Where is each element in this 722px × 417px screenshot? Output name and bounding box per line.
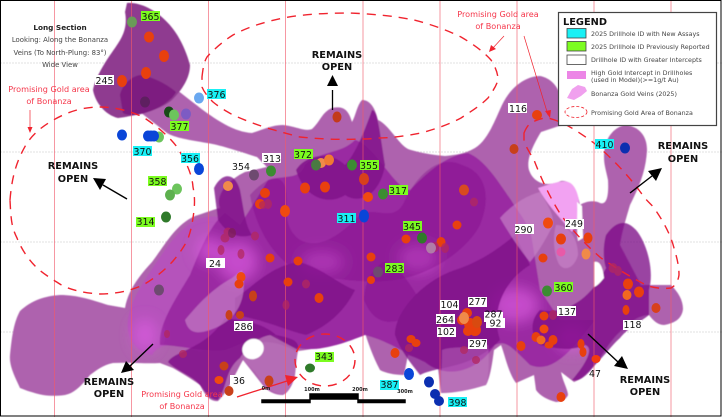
annotation: left: [8, 84, 90, 133]
open arrow: top centre: OPEN: [322, 62, 352, 73]
legend item: greater intercepts: Drillhole ID with Greater Intercepts: [591, 57, 702, 64]
open arrow: right top: REMAINS: [658, 141, 708, 152]
labels: greater intercepts (white): 290: [515, 225, 532, 236]
legend item: previously reported: [567, 42, 710, 51]
open arrow: bottom right: [588, 334, 670, 398]
annotation: bottom: [141, 375, 298, 411]
open arrow: bottom left: OPEN: [94, 389, 124, 400]
annotation: top right: of Bonanza: [475, 21, 521, 31]
labels: previously reported (green): 343: [315, 352, 333, 363]
open arrow: right top: OPEN: [668, 154, 698, 165]
labels: previously reported (green): 358: [149, 177, 166, 188]
vein: upper left lobe 365: [93, 3, 190, 118]
vein: deep purple folds: [168, 110, 651, 400]
markers: orange-red intercepts: [117, 32, 660, 402]
labels: greater intercepts (white): 277: [469, 297, 486, 308]
labels: previously reported (green): [136, 11, 573, 363]
vein: overlapped lobe dark: [120, 75, 176, 115]
open arrow: left: REMAINS: [48, 161, 98, 172]
vein: lighter translucent overlays: [185, 192, 578, 394]
labels: new assays (cyan): 398: [449, 398, 466, 409]
promising gold annotations: [8, 9, 551, 411]
annotation: left: Promising Gold area: [8, 84, 90, 94]
legend item: bonanza veins: [567, 85, 677, 100]
labels: previously reported (green): 365: [142, 12, 159, 23]
long section description: Wide View: [42, 61, 78, 69]
gaps: white notches in the right lobes: [577, 202, 604, 287]
legend item: greater intercepts: [567, 55, 702, 64]
annotation: bottom: of Bonanza: [159, 401, 205, 411]
annotation: bottom: Promising Gold area: [141, 389, 223, 399]
labels: previously reported (green): 377: [171, 122, 188, 133]
labels: greater intercepts (white): 245: [96, 76, 113, 87]
open arrow: top centre: [312, 50, 362, 110]
labels: previously reported (green): 317: [389, 186, 407, 197]
dashed area: top centre: [202, 13, 498, 139]
long section description: Long Section: [33, 23, 87, 32]
long section description: [12, 23, 108, 69]
labels: greater intercepts (white): 102: [437, 327, 455, 338]
dashed area: left: [10, 107, 194, 294]
labels: previously reported (green): 372: [294, 150, 312, 161]
vein: bright right lobe: [538, 181, 579, 232]
labels: new assays (cyan): 376: [208, 90, 225, 101]
annotation: top right: Promising Gold area: [457, 9, 539, 19]
drillhole markers: [117, 16, 660, 406]
labels: new assays (cyan): 311: [338, 214, 355, 225]
labels: previously reported (green): 283: [386, 264, 403, 275]
long section description: Veins (To North-Plung: 83°): [14, 49, 107, 57]
vein: bright highlight patches: [133, 236, 588, 351]
legend item: previously reported: 2025 Drillhole ID Previously Reported: [591, 44, 710, 51]
legend item: new assays: [567, 28, 700, 38]
labels: greater intercepts (white): 47: [589, 369, 601, 380]
long section description: Looking: Along the Bonanza: [12, 36, 108, 44]
vein: main light body: [10, 76, 683, 402]
vein: middle magenta mass: [160, 140, 595, 372]
labels: new assays (cyan): 370: [134, 147, 151, 158]
labels: greater intercepts (white): 354: [232, 162, 250, 173]
open arrow: left: [48, 161, 127, 199]
labels: new assays (cyan): [133, 89, 614, 409]
remains open labels and arrows: [48, 50, 708, 400]
labels: new assays (cyan): 410: [596, 140, 613, 151]
legend item: bonanza veins: Bonanza Gold Veins (2025): [591, 91, 677, 98]
open arrow: bottom right: REMAINS: [620, 375, 670, 386]
labels: greater intercepts (white): 297: [469, 339, 487, 350]
labels: greater intercepts (white): 137: [558, 307, 576, 318]
labels: greater intercepts (white): 36: [233, 376, 245, 387]
markers: dim maroon intercepts: [164, 198, 622, 364]
labels: previously reported (green): 314: [137, 217, 154, 228]
labels: greater intercepts (white): 118: [624, 320, 641, 331]
open arrow: right top: [630, 141, 708, 193]
open arrow: bottom right: OPEN: [630, 387, 660, 398]
legend item: promising area: [565, 106, 693, 118]
scale bar: 100m: [304, 387, 320, 393]
markers: light orange and pink: [223, 154, 590, 324]
legend: [558, 12, 716, 126]
labels: previously reported (green): 355: [360, 161, 378, 172]
vein: left lobe magenta: [128, 217, 240, 355]
labels: greater intercepts (white): [95, 75, 642, 387]
labels: greater intercepts (white): 92: [490, 318, 501, 330]
labels: greater intercepts (white): 104: [441, 300, 458, 311]
markers: grey-purple drillholes: [140, 96, 436, 296]
scale bar: 0m: [262, 386, 270, 392]
annotation: left: of Bonanza: [26, 96, 72, 106]
dashed area: right: [524, 118, 679, 288]
open arrow: bottom left: [84, 344, 153, 400]
labels: greater intercepts (white): 249: [565, 219, 583, 230]
scale bar: 200m: [352, 387, 368, 393]
labels: new assays (cyan): 387: [381, 380, 398, 391]
legend item: new assays: 2025 Drillhole ID with New Assays: [591, 31, 700, 38]
scale bar: 300m: [397, 389, 413, 395]
open arrow: bottom left: REMAINS: [84, 377, 134, 388]
legend item: high gold intercept: High Gold Intercept in Drillholes: [591, 70, 692, 77]
labels: previously reported (green): 360: [555, 283, 572, 294]
labels: greater intercepts (white): 313: [263, 154, 281, 165]
labels: greater intercepts (white): 286: [235, 322, 252, 333]
markers: blue new assay drillholes: [117, 92, 630, 406]
drillhole ID labels: [95, 11, 642, 409]
legend title: LEGEND: [563, 17, 607, 28]
legend item: high gold intercept: [567, 70, 692, 84]
labels: greater intercepts (white): 264: [436, 315, 454, 326]
annotation: top right: [457, 9, 551, 118]
labels: greater intercepts (white): 287: [485, 310, 502, 320]
markers: green drillholes: [127, 16, 552, 372]
gaps: white hole in the vein: [238, 335, 268, 363]
open arrow: top centre: REMAINS: [312, 50, 362, 61]
labels: greater intercepts (white): 24: [209, 259, 221, 270]
legend item: promising area: Promising Gold Area of Bonanza: [591, 110, 693, 117]
legend item: high gold intercept: (used in Model)(>=1g/t Au): [591, 77, 679, 84]
labels: previously reported (green): 345: [403, 222, 421, 233]
dashed area: bottom: [295, 334, 355, 386]
open arrow: left: OPEN: [58, 174, 88, 185]
labels: greater intercepts (white): 116: [509, 104, 527, 115]
labels: new assays (cyan): 356: [181, 154, 199, 165]
scale bar: [262, 386, 413, 402]
